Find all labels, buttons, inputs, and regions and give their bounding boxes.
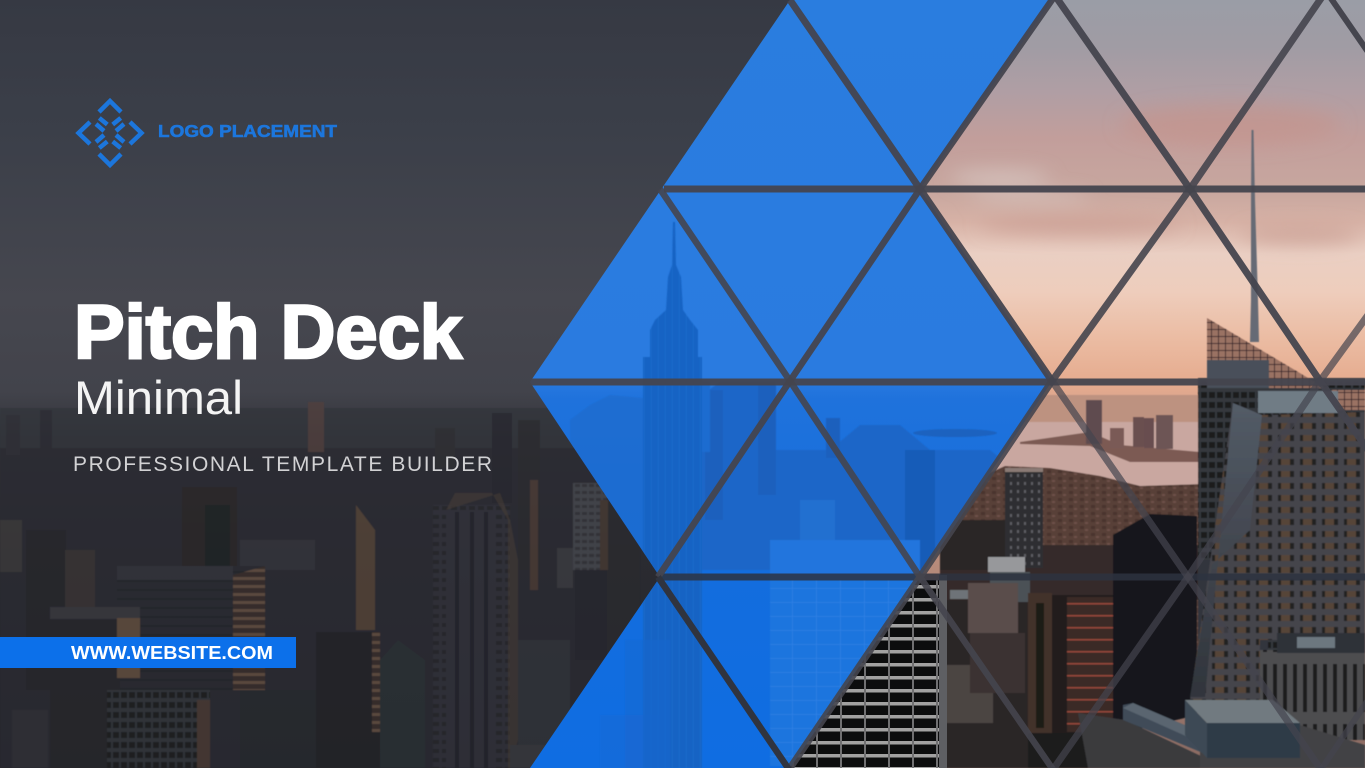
dark glass building: [1113, 514, 1197, 735]
red striped building: [1052, 595, 1113, 735]
sky: [922, 0, 1365, 768]
dark apartment tower: [1005, 468, 1043, 568]
roof: [1078, 713, 1200, 768]
lower right building: [1260, 650, 1365, 740]
panel: blue triangles: [520, 0, 1060, 768]
website bar: [0, 637, 296, 668]
far shore: [1029, 394, 1199, 422]
antenna: [1250, 130, 1259, 342]
distant blue skyline: [570, 395, 643, 560]
dark city skyline on the left: [0, 402, 640, 768]
title: Pitch Deck: [74, 290, 463, 375]
far towers: [1086, 400, 1102, 444]
midtown low city: [959, 466, 1199, 650]
panel: black and white tower in lower triangle: [790, 575, 947, 768]
front building: [1190, 403, 1365, 700]
light grid building: [770, 540, 920, 574]
website bar: WWW.WEBSITE.COM: [71, 643, 273, 663]
clouds: [950, 105, 1360, 244]
tagline: PROFESSIONAL TEMPLATE BUILDER: [73, 453, 492, 476]
subtitle: Minimal: [74, 371, 243, 424]
foreground low blocks: [940, 600, 1030, 768]
logo wordmark: LOGO PLACEMENT: [158, 121, 337, 141]
big tower: [1197, 377, 1365, 651]
triangular grid lines: [530, 0, 1365, 768]
tower lattice crown: [1207, 318, 1325, 388]
icon: logo: [78, 101, 142, 165]
empire state silhouette: [643, 222, 702, 768]
panel: right photo with sunset sky: [922, 0, 1365, 768]
